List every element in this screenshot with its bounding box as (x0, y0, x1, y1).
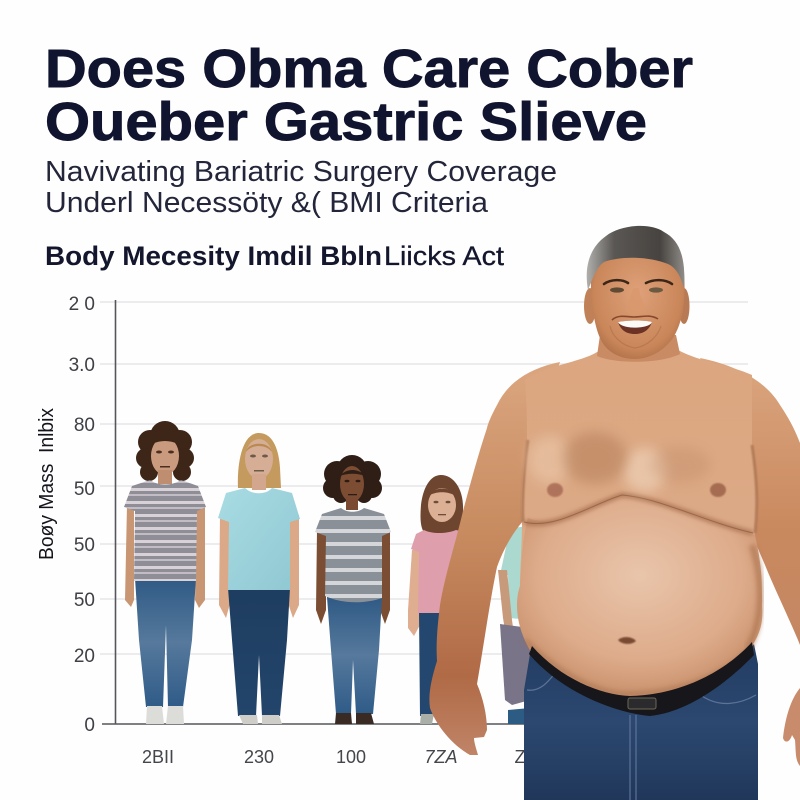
jeans seams and pockets (527, 672, 756, 800)
navel (618, 637, 636, 644)
y axis tick labels: 0 (84, 715, 95, 736)
nose (626, 288, 646, 315)
y axis tick labels: 50 (74, 590, 95, 611)
smile (618, 320, 652, 334)
face (591, 240, 685, 359)
person 4: pink tee girl (408, 475, 465, 724)
title: Does Obma Care Cober (45, 39, 693, 99)
left arm (429, 362, 560, 755)
ears (584, 288, 596, 324)
belly right shadow (748, 545, 760, 648)
y axis tick labels: 3.0 (69, 355, 95, 376)
x axis tick labels: 2BII (142, 747, 174, 767)
y axis tick labels: 50 (74, 535, 95, 556)
y axis tick labels: 50 (74, 479, 95, 500)
pectoral highlights and chest hair (528, 436, 572, 484)
right arm (700, 358, 800, 645)
person 5: teal tee, partly hidden (498, 526, 532, 724)
subtitle: Underl Necessöty &( BMI Criteria (45, 187, 489, 219)
person 2: blond hair, light blue tee (218, 433, 300, 724)
x axis tick labels (142, 747, 526, 767)
x axis tick labels: 7ZA (424, 747, 458, 767)
right hand (783, 688, 800, 766)
torso (517, 350, 762, 696)
x axis tick labels: Z (514, 747, 526, 767)
person 1: curly hair, striped tee (124, 421, 206, 724)
y axis tick labels (69, 294, 95, 736)
y axis tick labels: 20 (74, 646, 95, 667)
chest shadow fold (524, 495, 753, 533)
hair (587, 226, 684, 290)
title: Oueber Gastric Slieve (45, 92, 647, 152)
person 3: curly dark hair, striped tee (315, 455, 391, 724)
jeans (524, 644, 758, 800)
neck (597, 335, 680, 362)
y axis tick labels: 2 0 (69, 294, 95, 315)
chart heading: Liicks Act (384, 241, 505, 271)
belly (517, 495, 762, 696)
y axis tick labels: 80 (74, 415, 95, 436)
man: shirtless, smiling, foreground (429, 226, 800, 800)
x axis tick labels: 230 (244, 747, 274, 767)
nipples (547, 483, 563, 497)
subtitle (45, 156, 557, 219)
subtitle: Navivating Bariatric Surgery Coverage (45, 156, 557, 188)
armpit shadows (523, 440, 757, 533)
title (45, 39, 693, 152)
eyebrows (604, 280, 672, 284)
belt buckle (628, 698, 656, 709)
chart heading: Body Mecesity Imdil Bbln (45, 241, 382, 271)
eyes (610, 287, 624, 293)
chart: body mass index axes and grid (36, 294, 748, 767)
belt (529, 642, 754, 716)
x axis tick labels: 100 (336, 747, 366, 767)
y axis title: Boøy Mass Inlbix (36, 408, 58, 560)
